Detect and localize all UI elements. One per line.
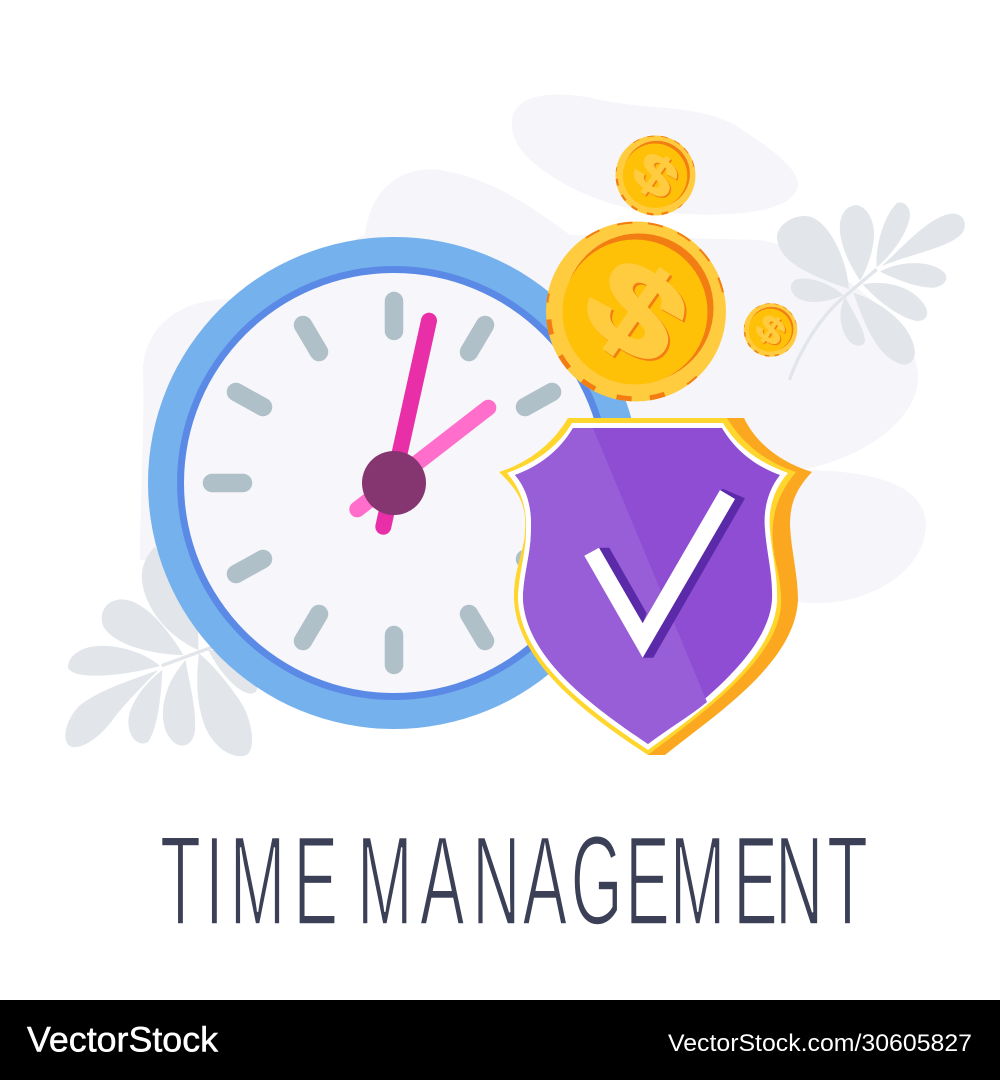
clock bbox=[148, 237, 640, 729]
clock inner ring bbox=[177, 266, 611, 700]
clock tick marks bbox=[212, 301, 552, 665]
watermark logo: VectorStock bbox=[27, 1020, 219, 1060]
check mark bbox=[584, 490, 735, 658]
watermark bar bbox=[0, 1000, 1000, 1080]
shield orange side bbox=[648, 418, 812, 755]
hour hand bbox=[357, 408, 488, 509]
shield bbox=[499, 418, 812, 755]
top coin: $ bbox=[622, 139, 690, 211]
title: TIME MANAGEMENT bbox=[160, 810, 868, 952]
minute hand bbox=[383, 321, 429, 527]
leaf sprig bottom left bbox=[65, 547, 257, 756]
small coin: $ bbox=[748, 306, 793, 354]
watermark url: VectorStock.com/30605827 bbox=[668, 1030, 972, 1057]
clock face bbox=[184, 273, 604, 693]
clock hub bbox=[362, 451, 426, 515]
shield white outline bbox=[507, 423, 788, 750]
shield yellow outline bbox=[499, 418, 796, 755]
check shadow bbox=[599, 489, 745, 658]
large coin: $ bbox=[561, 230, 712, 391]
background blobs bbox=[140, 95, 926, 603]
shield body bbox=[515, 428, 780, 744]
clock outer ring bbox=[148, 237, 640, 729]
leaf sprig top right bbox=[777, 202, 965, 380]
shield light facet bbox=[515, 428, 707, 744]
